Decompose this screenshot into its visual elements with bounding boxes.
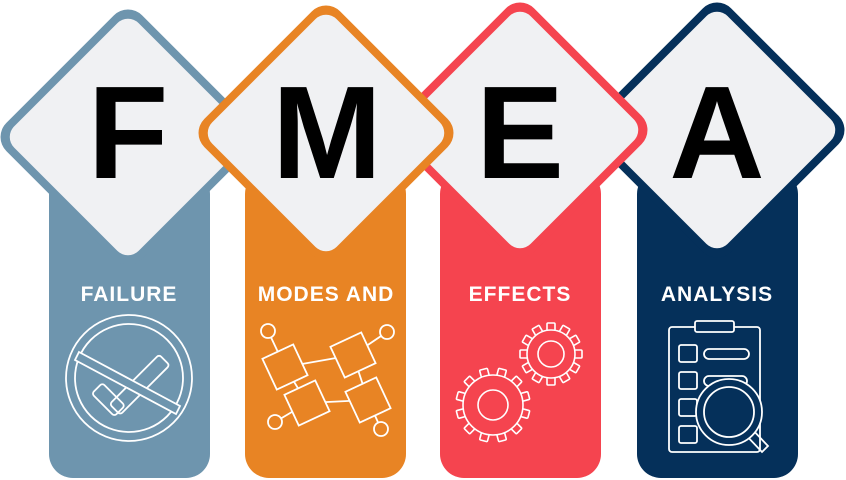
- diamond: F: [0, 1, 264, 273]
- diamond: M: [190, 0, 462, 269]
- column: failure: [49, 170, 210, 478]
- diamond: F: F: [88, 59, 168, 206]
- label: failure: FAILURE: [81, 283, 177, 306]
- icon: prohibited check: [66, 315, 192, 441]
- diamond: E: [384, 0, 656, 266]
- label: effects: EFFECTS: [469, 283, 571, 306]
- column: effects: [440, 170, 601, 478]
- icon: clipboard with magnifier: [669, 321, 768, 452]
- diamond: E: E: [476, 59, 564, 206]
- label: modes and: MODES AND: [258, 283, 394, 306]
- diamond: M: M: [272, 59, 382, 206]
- icon: gears: [456, 323, 582, 442]
- column: modes and: [245, 170, 406, 478]
- icon: connected blocks: [261, 324, 394, 436]
- label: analysis: ANALYSIS: [661, 283, 773, 306]
- column: analysis: [637, 170, 798, 478]
- diamond: A: [581, 0, 846, 266]
- diamond: A: A: [669, 59, 765, 206]
